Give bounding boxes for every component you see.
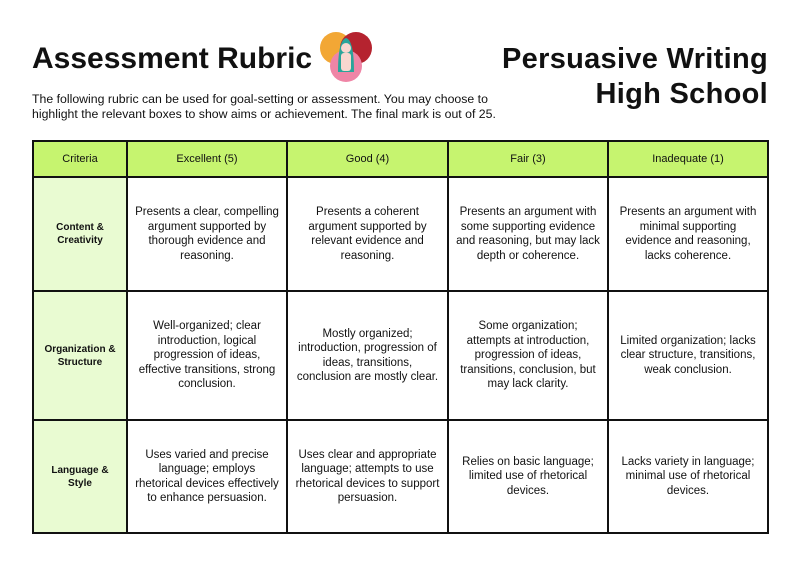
rubric table: Lacks variety in language; minimal use of rhetorical devices. (622, 456, 754, 497)
rubric table: Some organization; attempts at introduction, progression of ideas, transitions, conclusion, but may lack clarity. (460, 320, 596, 390)
subtitle: Persuasive Writing (502, 43, 768, 75)
rubric table: Presents a clear, compelling argument supported by thorough evidence and reasoning. (135, 206, 279, 262)
rubric table: Excellent (5) (176, 153, 238, 165)
intro text: The following rubric can be used for goal-setting or assessment. You may choose to highlight the relevant boxes to show aims or achievement. The final mark is out of 25. (32, 92, 496, 121)
row: language (32, 421, 769, 534)
rubric table: Style (68, 478, 92, 488)
rubric table: Organization & (44, 344, 116, 354)
rubric table: Presents an argument with some supporting evidence and reasoning, but may lack depth or coherence. (456, 206, 600, 262)
rubric table: Good (4) (346, 153, 389, 165)
rubric table: Inadequate (1) (652, 153, 724, 165)
rubric table: Criteria (62, 153, 98, 165)
rubric table: Uses clear and appropriate language; attempts to use rhetorical devices to support persuasion. (296, 448, 439, 504)
rubric table: Relies on basic language; limited use of rhetorical devices. (462, 456, 594, 497)
rubric table: Mostly organized; introduction, progression of ideas, transitions, conclusion are mostly clear. (297, 328, 438, 383)
rubric table: Content & (56, 222, 104, 233)
icon: overlapping circles logo (320, 32, 372, 82)
rubric table: Well-organized; clear introduction, logical progression of ideas, effective transitions, strong conclusion. (139, 320, 275, 390)
rubric table: Fair (3) (510, 153, 546, 165)
subtitle (502, 43, 768, 110)
rubric table: Presents a coherent argument supported by relevant evidence and reasoning. (308, 206, 427, 262)
rubric table: Presents an argument with minimal supporting evidence and reasoning, lacks coherence. (620, 206, 756, 262)
header row (32, 140, 769, 176)
rubric table: Creativity (57, 235, 103, 246)
rubric table: Language & (51, 464, 109, 476)
rubric table: Uses varied and precise language; employs rhetorical devices effectively to enhance persuasion. (135, 448, 279, 504)
rubric table: Structure (58, 356, 102, 368)
title: Assessment Rubric (32, 42, 312, 75)
rubric table: Limited organization; lacks clear structure, transitions, weak conclusion. (620, 335, 756, 376)
row: content & creativity (32, 178, 769, 290)
row: organization (32, 292, 769, 419)
subtitle: High School (596, 78, 768, 110)
